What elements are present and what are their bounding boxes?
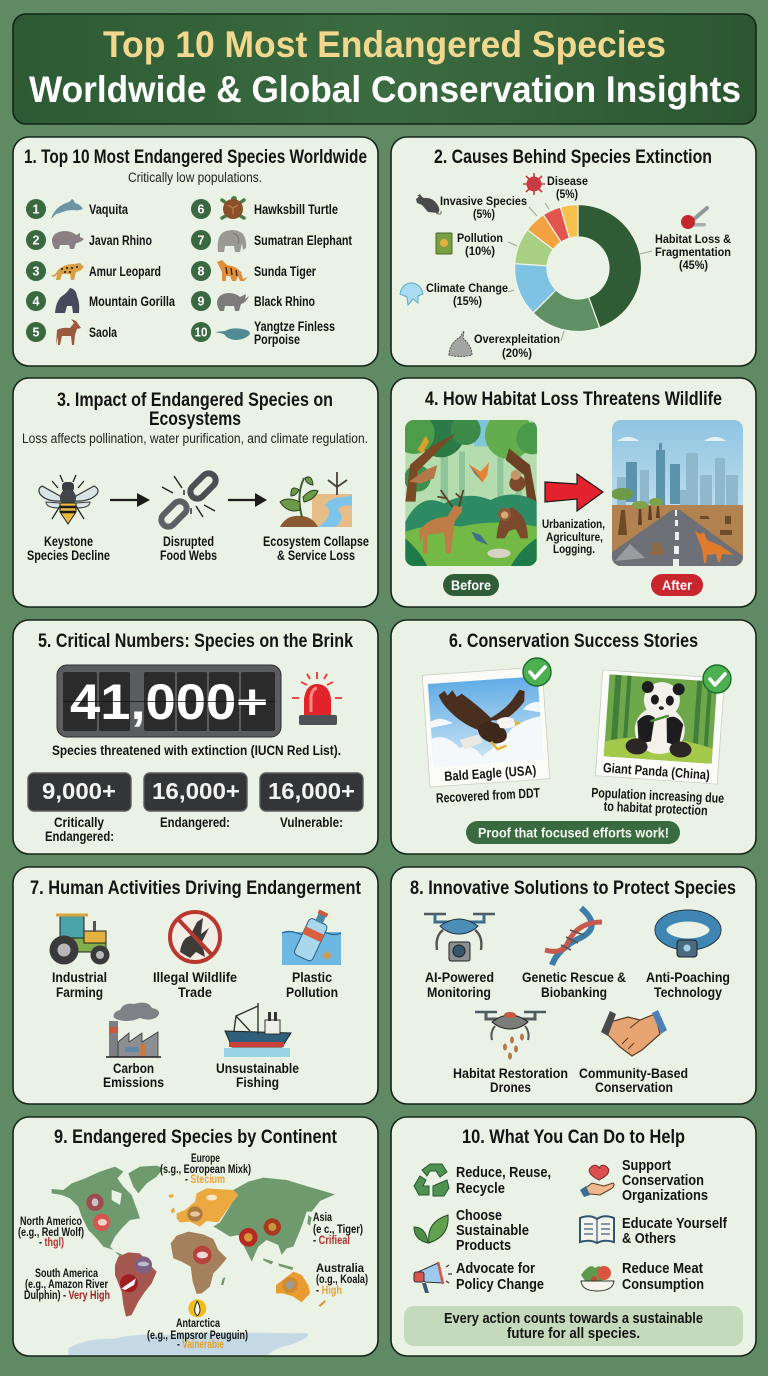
caption	[160, 534, 217, 563]
stat: critically endangered: Endangered:	[45, 829, 114, 844]
caption: Carbon	[113, 1061, 154, 1076]
heading: 9. Endangered Species by Continent	[54, 1126, 337, 1148]
caption: Keystone	[44, 534, 93, 549]
label: europe: Europe	[191, 1153, 220, 1165]
label: australia: Australia	[316, 1263, 365, 1275]
caption: Illegal Wildlife	[153, 970, 237, 985]
label: australia	[316, 1263, 368, 1297]
action: reduce meat: Consumption	[622, 1277, 704, 1293]
heading: 3. Impact of Endangered Species on	[57, 389, 333, 411]
caption: & Service Loss	[277, 548, 355, 563]
title line 1: Top 10 Most Endangered Species	[103, 24, 666, 65]
panel: success stories	[391, 620, 756, 854]
caption	[646, 970, 730, 1000]
label: habitat loss	[655, 208, 731, 272]
caption	[579, 1066, 688, 1095]
before pill	[443, 574, 499, 596]
label: climate change: Climate Change	[426, 283, 508, 295]
label: asia: - Crifieal	[313, 1235, 350, 1247]
action: sustainable: Choose	[456, 1208, 502, 1224]
donut chart	[515, 204, 642, 332]
species 4: Mountain Gorilla	[89, 294, 175, 309]
label: south america: Dulphin) - Very High	[24, 1290, 110, 1302]
label: europe: - Stecium	[185, 1174, 225, 1186]
urbanization caption: Agriculture,	[546, 532, 603, 544]
caption panda: to habitat protection	[603, 799, 708, 818]
species 1: Vaquita	[89, 202, 128, 217]
label: antarctica	[147, 1318, 248, 1351]
species 10	[191, 319, 335, 347]
species 2: Javan Rhino	[89, 233, 152, 248]
stat: critically endangered	[28, 773, 131, 844]
label: europe: (s.g., Eoropean Mixk)	[160, 1164, 251, 1176]
caption: Industrial	[52, 970, 107, 985]
action: sustainable: Sustainable	[456, 1223, 529, 1239]
species 8	[191, 260, 317, 281]
urbanization caption	[542, 519, 605, 556]
caption: Trade	[178, 985, 212, 1000]
label: asia: Asia	[313, 1212, 332, 1224]
label: north america: North Americo	[20, 1216, 82, 1228]
before pill: Before	[451, 578, 491, 593]
label: overexploitation	[449, 331, 560, 360]
species 6: Hawksbill Turtle	[254, 202, 338, 217]
label: climate change	[400, 283, 508, 308]
caption	[216, 1061, 299, 1090]
heading: 10. What You Can Do to Help	[462, 1126, 685, 1148]
caption: Species Decline	[27, 548, 110, 563]
caption	[425, 970, 494, 1000]
action: educate: Educate Yourself	[622, 1216, 727, 1232]
caption	[286, 970, 338, 1000]
icon: tractor	[50, 915, 110, 964]
species 9	[191, 291, 315, 311]
caption: Genetic Rescue &	[522, 970, 626, 985]
caption: Habitat Restoration	[453, 1066, 568, 1081]
species 3: 3	[33, 264, 40, 278]
caption: Conservation	[595, 1080, 673, 1095]
label: invasive species: Invasive Species	[440, 196, 527, 208]
illustration: forest before	[405, 420, 537, 566]
species 7: 7	[198, 234, 205, 248]
action: sustainable	[414, 1208, 529, 1254]
panel: innovative solutions	[391, 867, 756, 1104]
action: recycle: Recycle	[456, 1181, 505, 1197]
caption: Drones	[490, 1080, 531, 1095]
after pill: After	[662, 578, 693, 593]
action: support: Conservation	[622, 1173, 704, 1189]
panel: by continent	[13, 1117, 378, 1357]
panel: critical numbers	[13, 620, 378, 854]
species 10: 10	[194, 326, 208, 340]
action: recycle: Reduce, Reuse,	[456, 1165, 551, 1181]
action: sustainable: Products	[456, 1238, 511, 1254]
photo: giant panda: Giant Panda (China)	[603, 760, 710, 783]
stat: vulnerable: Vulnerable:	[280, 815, 343, 830]
caption: Food Webs	[160, 548, 217, 563]
icon: dna	[545, 908, 602, 965]
action: recycle	[414, 1164, 551, 1197]
stat: endangered: 16,000+	[152, 778, 240, 804]
species 3	[26, 261, 161, 281]
panel: top 10 species	[13, 137, 378, 366]
icon: no wildlife trade	[170, 912, 220, 962]
species 7: Sumatran Elephant	[254, 233, 352, 248]
caption: Fishing	[236, 1075, 279, 1090]
icon: alarm	[292, 672, 342, 725]
urbanization caption: Urbanization,	[542, 519, 605, 531]
illustration: city after	[611, 420, 743, 567]
caption: Anti-Poaching	[646, 970, 730, 985]
caption	[103, 1061, 164, 1090]
action: support: Support	[622, 1158, 671, 1174]
caption: Species threatened with extinction (IUCN Red List).	[52, 743, 341, 758]
species 2	[26, 230, 152, 250]
caption	[263, 534, 369, 563]
label: south america: South America	[35, 1268, 98, 1280]
continent badges	[86, 1189, 298, 1317]
panel: ecosystem impact	[13, 378, 378, 607]
world map	[52, 1166, 335, 1357]
subtitle: Critically low populations.	[128, 170, 262, 185]
big counter	[57, 665, 281, 737]
header banner	[13, 14, 756, 124]
title line 2: Worldwide & Global Conservation Insights	[29, 69, 741, 110]
icon: fishing vessel	[224, 1003, 291, 1057]
species 1	[26, 199, 128, 219]
species 2: 2	[33, 234, 40, 248]
label: south america: (e.g., Amazon River	[25, 1279, 108, 1291]
label: disease: (5%)	[556, 189, 578, 201]
icon: ecosystem collapse	[280, 472, 352, 527]
label: north america: (e.g., Red Wolf)	[18, 1227, 84, 1239]
leader lines	[508, 203, 652, 341]
heading	[57, 389, 333, 430]
heading: 6. Conservation Success Stories	[449, 630, 698, 652]
heading: Ecosystems	[149, 408, 241, 430]
after pill	[651, 574, 703, 596]
action: advocate: Policy Change	[456, 1277, 544, 1293]
label: overexploitation: Overexpleitation	[474, 334, 560, 346]
species 1: 1	[33, 202, 40, 216]
caption	[27, 534, 110, 563]
caption panda	[590, 785, 725, 819]
label: asia	[313, 1212, 363, 1247]
label: antarctica: (e.g., Empsror Peuguin)	[147, 1330, 248, 1342]
caption: Unsustainable	[216, 1061, 299, 1076]
arrow	[545, 474, 603, 511]
label: habitat loss: Fragmentation	[655, 247, 731, 259]
big counter: 41,000+	[70, 674, 268, 730]
icon: anti-poaching collar	[655, 910, 721, 957]
caption	[52, 970, 107, 1000]
proof pill: Proof that focused efforts work!	[478, 826, 669, 840]
action: reduce meat: Reduce Meat	[622, 1261, 703, 1277]
panel: habitat loss	[391, 378, 756, 607]
heading: 7. Human Activities Driving Endangerment	[30, 877, 361, 899]
label: overexploitation: (20%)	[502, 348, 532, 360]
action: support	[580, 1158, 708, 1204]
label: europe	[160, 1153, 251, 1186]
label: habitat loss: Habitat Loss &	[655, 234, 731, 246]
species 10: Yangtze Finless	[254, 319, 335, 334]
photo: giant panda	[595, 670, 725, 784]
heading: 5. Critical Numbers: Species on the Brink	[38, 630, 353, 652]
stat: vulnerable: 16,000+	[268, 778, 355, 804]
icon: handshake	[601, 1010, 667, 1056]
action: educate: & Others	[622, 1231, 676, 1247]
subtitle: Loss affects pollination, water purification, and climate regulation.	[22, 431, 368, 446]
caption: Monitoring	[427, 985, 491, 1000]
callout: Every action counts towards a sustainable	[444, 1311, 703, 1327]
caption: Emissions	[103, 1075, 164, 1090]
species 10: Porpoise	[254, 332, 300, 347]
label: climate change: (15%)	[453, 296, 482, 308]
photo: bald eagle: Bald Eagle (USA)	[444, 763, 537, 784]
caption: Farming	[56, 985, 103, 1000]
species 3: Amur Leopard	[89, 264, 161, 279]
species 9: 9	[198, 294, 205, 308]
photo: bald eagle	[422, 667, 550, 787]
action: reduce meat	[581, 1261, 704, 1293]
action: educate	[580, 1216, 727, 1247]
stat: vulnerable	[260, 773, 363, 830]
label: australia: (o.g., Koala)	[316, 1274, 368, 1286]
icon: plastic pollution	[282, 907, 341, 965]
proof pill	[466, 821, 680, 844]
species 4: 4	[33, 294, 40, 308]
caption: AI-Powered	[425, 970, 494, 985]
label: habitat loss: (45%)	[679, 260, 708, 272]
label: disease: Disease	[547, 176, 588, 188]
panel: human activities	[13, 867, 378, 1104]
icon: restoration drone	[475, 1012, 546, 1060]
label: australia: - High	[316, 1285, 342, 1297]
caption panda: Population increasing due	[591, 785, 725, 806]
caption	[453, 1066, 568, 1095]
icon: carbon emissions	[106, 1003, 161, 1057]
stat: endangered	[144, 773, 247, 830]
caption: Plastic	[292, 970, 332, 985]
species 6: 6	[198, 202, 205, 216]
stat: endangered: Endangered:	[160, 815, 230, 830]
label: north america: - thgl)	[39, 1237, 64, 1249]
caption: Technology	[654, 985, 722, 1000]
label: south america	[24, 1268, 110, 1302]
icon: bee	[39, 475, 98, 524]
label: disease	[523, 173, 588, 201]
label: asia: (e c., Tiger)	[313, 1224, 363, 1236]
label: antarctica: - Vainerabie	[177, 1339, 224, 1351]
callout	[404, 1306, 743, 1346]
caption: Disrupted	[163, 534, 214, 549]
species 7	[191, 230, 352, 252]
action: advocate	[414, 1261, 544, 1293]
panel: causes of extinction	[391, 137, 756, 366]
caption	[522, 970, 626, 1000]
icon: check panda	[703, 665, 731, 693]
label: antarctica: Antarctica	[176, 1318, 220, 1330]
species 8: Sunda Tiger	[254, 264, 317, 279]
species 6	[191, 196, 338, 219]
action: advocate: Advocate for	[456, 1261, 535, 1277]
icon: monitoring drone	[424, 914, 495, 961]
caption eagle: Recovered from DDT	[436, 785, 541, 806]
icon: check eagle	[523, 658, 551, 686]
caption: Community-Based	[579, 1066, 688, 1081]
label: north america	[18, 1216, 84, 1249]
caption: Pollution	[286, 985, 338, 1000]
species 5: 5	[33, 326, 40, 340]
stat: critically endangered: 9,000+	[42, 778, 116, 804]
callout: future for all species.	[507, 1326, 640, 1342]
label: invasive species	[416, 194, 527, 221]
caption: Ecosystem Collapse	[263, 534, 369, 549]
arrow	[228, 493, 267, 507]
species 4	[26, 288, 175, 313]
species 9: Black Rhino	[254, 294, 315, 309]
urbanization caption: Logging.	[553, 544, 595, 556]
label: pollution: (10%)	[465, 246, 495, 258]
caption	[153, 970, 237, 1000]
label: invasive species: (5%)	[473, 209, 495, 221]
action: support: Organizations	[622, 1188, 708, 1204]
heading: 2. Causes Behind Species Extinction	[434, 146, 712, 168]
arrow	[110, 493, 150, 507]
heading: 1. Top 10 Most Endangered Species Worldwide	[24, 146, 367, 168]
icon: broken chain	[158, 470, 219, 530]
species 5	[26, 319, 117, 345]
species 5: Saola	[89, 325, 117, 340]
label: pollution: Pollution	[457, 233, 503, 245]
species 8: 8	[198, 264, 205, 278]
label: pollution	[436, 233, 503, 258]
caption: Biobanking	[541, 985, 607, 1000]
stat: critically endangered: Critically	[54, 815, 104, 830]
panel: what you can do	[391, 1117, 756, 1356]
